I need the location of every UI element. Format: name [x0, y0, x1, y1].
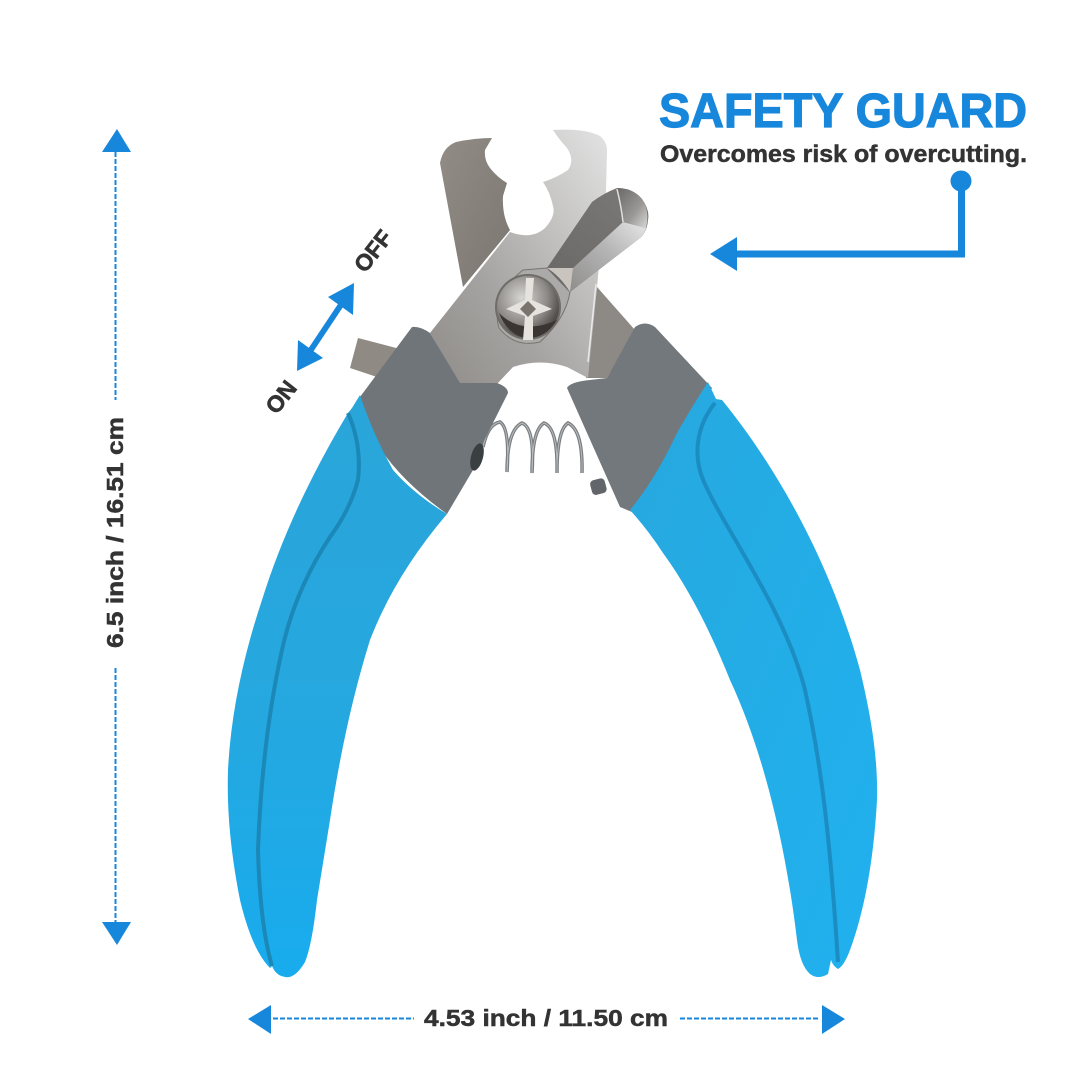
- width label: 4.53 inch / 11.50 cm: [424, 1005, 668, 1031]
- height dimension: [102, 129, 131, 945]
- label: on: ON: [260, 375, 302, 419]
- callout arrow to safety guard: [710, 170, 972, 271]
- height arrow top: [102, 129, 131, 152]
- height label: 6.5 inch / 16.51 cm: [102, 417, 128, 648]
- back blade: [440, 138, 635, 378]
- safety guard lever: [547, 188, 648, 292]
- front plate and upper jaw: [430, 130, 607, 384]
- plate edge highlight: [588, 284, 596, 362]
- product photo: dog nail clipper: [228, 130, 877, 977]
- left collar bolt: [468, 442, 486, 472]
- label: off: OFF: [349, 225, 397, 277]
- subheading: Overcomes risk of overcutting.: [660, 141, 1027, 168]
- right grey collar: [567, 324, 712, 512]
- pivot screw: [495, 274, 561, 340]
- lever base around screw: [497, 268, 570, 343]
- on/off double arrow: [297, 283, 354, 371]
- height arrow bottom: [102, 922, 131, 945]
- width dimension: [248, 1005, 845, 1034]
- left locking pin: [350, 338, 400, 378]
- left grey collar: [352, 327, 508, 514]
- right handle groove: [697, 403, 838, 962]
- heading: safety guard: SAFETY GUARD: [659, 85, 1027, 138]
- width arrow right: [822, 1005, 845, 1034]
- spring: [483, 422, 582, 473]
- right small rivet: [589, 477, 608, 496]
- right blue handle: [630, 382, 877, 977]
- left blue handle: [228, 395, 447, 977]
- left handle groove: [258, 413, 359, 966]
- width arrow left: [248, 1005, 271, 1034]
